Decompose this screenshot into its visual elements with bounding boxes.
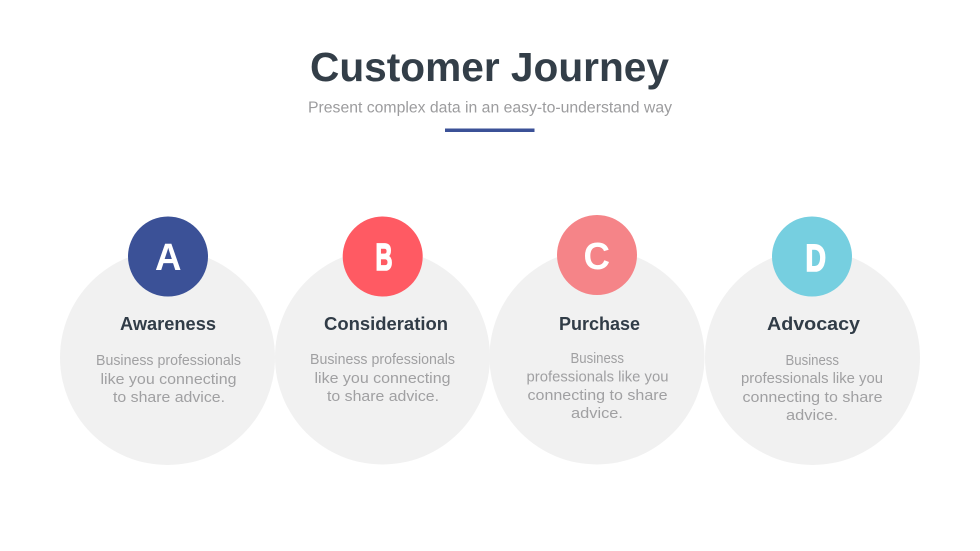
badge B: B — [376, 237, 392, 279]
description A: like you connecting — [100, 371, 236, 388]
badge D: D — [806, 238, 826, 280]
panel: awareness — [60, 216, 275, 465]
badge B — [343, 216, 423, 296]
description B: like you connecting — [314, 370, 450, 387]
title: Customer Journey — [310, 44, 669, 90]
description C: professionals like you — [526, 368, 668, 386]
background circle B — [275, 250, 490, 464]
description D: Business — [786, 352, 839, 369]
background circle D — [705, 250, 920, 465]
badge C: C — [584, 236, 610, 278]
heading: Consideration: Consideration — [324, 313, 448, 334]
badge D — [772, 216, 852, 296]
background circle A — [60, 250, 275, 465]
description C — [526, 350, 668, 422]
badge A — [128, 216, 208, 296]
description B — [310, 351, 455, 405]
description A — [96, 352, 241, 406]
panel: consideration — [275, 216, 490, 464]
description D: connecting to share — [742, 389, 882, 406]
description B: to share advice. — [327, 388, 439, 405]
panel: purchase — [490, 215, 704, 464]
description B: Business professionals — [310, 351, 455, 368]
heading: Awareness: Awareness — [120, 313, 216, 334]
title underline — [445, 128, 534, 132]
description D: professionals like you — [741, 370, 883, 387]
heading: Purchase: Purchase — [559, 313, 640, 334]
description D: advice. — [786, 407, 838, 424]
description A: to share advice. — [113, 389, 225, 406]
badge C — [557, 215, 637, 295]
description A: Business professionals — [96, 352, 241, 369]
heading: Advocacy: Advocacy — [767, 313, 861, 334]
description C: connecting to share — [528, 387, 668, 404]
description C: Business — [570, 350, 624, 367]
description D — [741, 352, 883, 424]
badge A: A — [155, 237, 182, 279]
panel: advocacy — [705, 216, 920, 465]
description C: advice. — [571, 405, 623, 422]
background circle C — [490, 250, 704, 464]
subtitle: Present complex data in an easy-to-understand way — [308, 100, 672, 116]
